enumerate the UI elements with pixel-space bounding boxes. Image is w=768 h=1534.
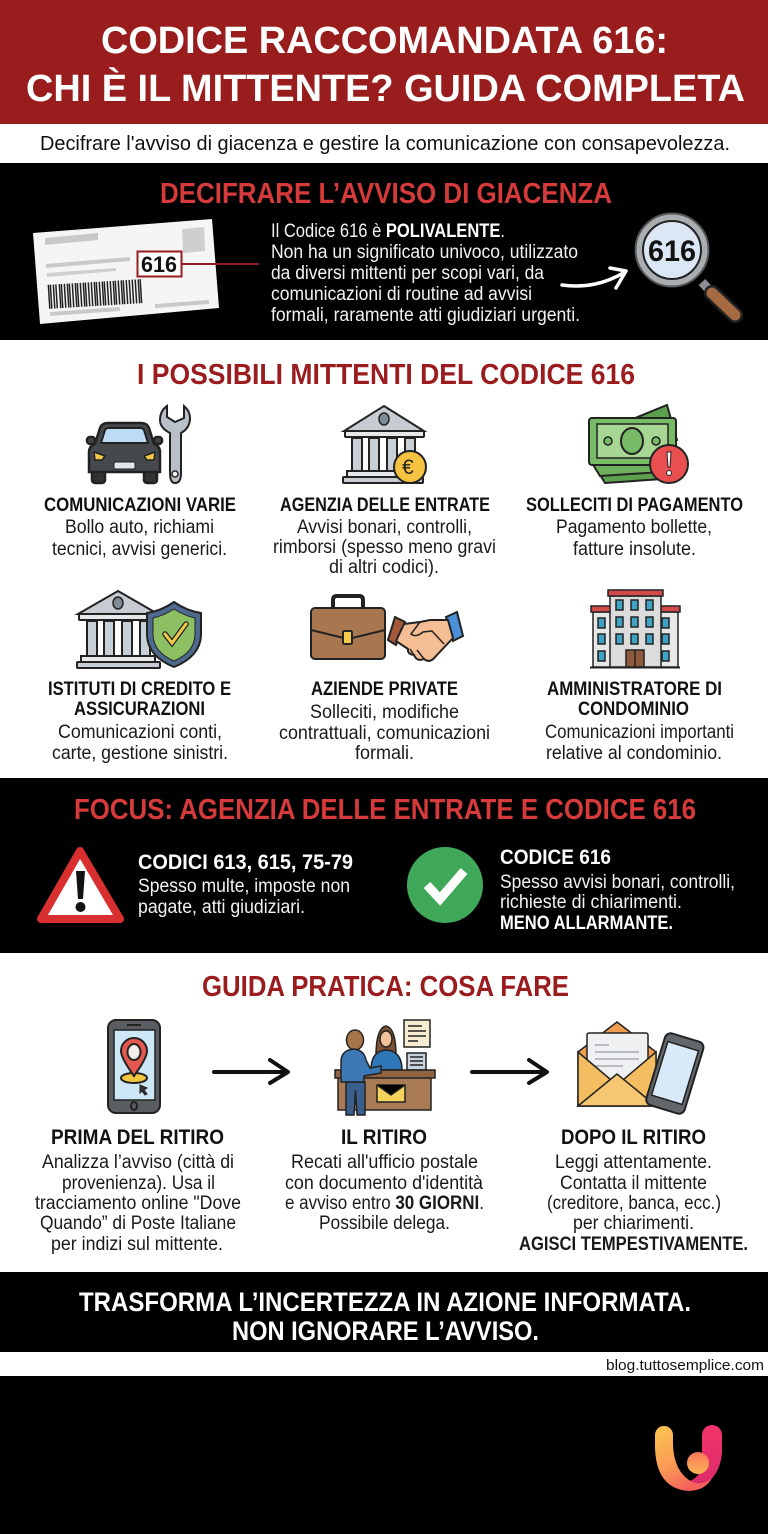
source credit	[0, 1352, 768, 1376]
panel: closing banner: NON IGNORARE L’AVVISO.	[232, 1316, 539, 1346]
label: di altri codici).	[329, 557, 439, 578]
icon: bank with euro coin	[343, 406, 426, 483]
step: il ritiro	[285, 1126, 484, 1234]
step: dopo il ritiro: per chiarimenti.	[573, 1213, 694, 1234]
footer area	[0, 1376, 768, 1534]
step: dopo il ritiro: (creditore, banca, ecc.)	[547, 1193, 721, 1214]
icon: bank with shield	[77, 591, 201, 668]
text: codice 616: MENO ALLARMANTE.	[500, 913, 673, 934]
icon: phone with map pin	[108, 1020, 160, 1113]
text: codici 613: CODICI 613, 615, 75-79	[138, 851, 353, 874]
label: relative al condominio.	[546, 743, 722, 764]
label: AMMINISTRATORE DI	[547, 679, 722, 700]
heading: guida pratica: GUIDA PRATICA: COSA FARE	[202, 971, 569, 1003]
text: polivalente: da diversi mittenti per scopi vari, da	[271, 263, 544, 284]
text: codice 616: richieste di chiarimenti.	[500, 892, 682, 913]
label: rimborsi (spesso meno gravi	[273, 537, 496, 558]
text: polivalente: Non ha un significato univoco, utilizzato	[271, 242, 578, 263]
step: il ritiro: e avviso entro 30 GIORNI.	[285, 1193, 484, 1214]
label: Bollo auto, richiami	[65, 517, 214, 538]
icon: logo	[655, 1425, 722, 1491]
heading: focus: FOCUS: AGENZIA DELLE ENTRATE E CODICE 616	[74, 794, 696, 826]
icon: postal notice	[33, 219, 259, 324]
icon: briefcase and handshake	[311, 596, 463, 661]
arrow: step 2 to 3	[472, 1060, 547, 1083]
item: amministratore di condominio	[545, 590, 734, 764]
label	[273, 495, 496, 578]
text: codice 616: Spesso avvisi bonari, controlli,	[500, 872, 735, 893]
icon: warning triangle	[41, 851, 120, 919]
step: prima del ritiro: tracciamento online "Dove	[35, 1193, 241, 1214]
step: prima del ritiro	[35, 1126, 241, 1255]
panel: decifrare l'avviso	[0, 163, 768, 340]
item: comunicazioni varie	[44, 406, 236, 560]
step: dopo il ritiro: Contatta il mittente	[560, 1173, 707, 1194]
item: istituti di credito	[48, 591, 231, 764]
step: prima del ritiro: per indizi sul mittente.	[51, 1234, 223, 1255]
item: agenzia delle entrate	[273, 406, 496, 578]
text: codici 613	[138, 851, 353, 918]
title: CHI È IL MITTENTE? GUIDA COMPLETA	[26, 66, 745, 110]
icon: car and wrench	[87, 406, 190, 483]
text: polivalente: comunicazioni di routine ad avvisi	[271, 284, 532, 305]
icon: bank with euro coin: €	[402, 456, 414, 479]
panel: focus agenzia delle entrate	[0, 778, 768, 953]
title: CODICE RACCOMANDATA 616:	[101, 20, 668, 62]
step: dopo il ritiro: DOPO IL RITIRO	[561, 1126, 706, 1149]
icon: magnifier: 616	[648, 235, 696, 268]
label	[48, 679, 231, 764]
label: carte, gestione sinistri.	[52, 743, 228, 764]
source credit: blog.tuttosemplice.com	[606, 1357, 764, 1374]
icon: open envelope and phone	[578, 1022, 705, 1115]
label: AGENZIA DELLE ENTRATE	[280, 495, 490, 516]
step: prima del ritiro: PRIMA DEL RITIRO	[51, 1126, 224, 1149]
header band	[0, 0, 768, 124]
label: contrattuali, comunicazioni	[279, 723, 490, 744]
text: codice 616	[500, 846, 735, 934]
icon: green check	[407, 847, 483, 923]
subtitle band	[0, 124, 768, 163]
step: dopo il ritiro	[519, 1126, 748, 1255]
step: prima del ritiro: Quando” di Poste Italiane	[40, 1213, 236, 1234]
icon: apartment building	[590, 590, 680, 668]
label	[279, 679, 490, 764]
arrow: step 1 to 2	[214, 1060, 288, 1083]
step: il ritiro: Possibile delega.	[319, 1213, 450, 1234]
text: polivalente: Il Codice 616 è POLIVALENTE.	[271, 221, 505, 242]
icon: magnifier	[636, 214, 735, 315]
icon: post office counter	[335, 1020, 435, 1115]
item: aziende private	[279, 596, 490, 764]
label: Pagamento bollette,	[556, 517, 712, 538]
label	[545, 679, 734, 764]
label: tecnici, avvisi generici.	[52, 539, 227, 560]
title	[26, 20, 745, 110]
arrow: to magnifier	[562, 268, 626, 288]
label: Comunicazioni importanti	[545, 722, 734, 743]
text: codici 613: Spesso multe, imposte non	[138, 876, 350, 897]
label	[44, 495, 236, 560]
label: Comunicazioni conti,	[58, 722, 222, 743]
label: fatture insolute.	[573, 539, 696, 560]
step: il ritiro: IL RITIRO	[341, 1126, 427, 1149]
step: prima del ritiro: Analizza l’avviso (città di	[42, 1152, 234, 1173]
label: formali.	[355, 743, 414, 764]
label: Solleciti, modifiche	[310, 702, 459, 723]
label: COMUNICAZIONI VARIE	[44, 495, 236, 516]
panel: closing banner: TRASFORMA L’INCERTEZZA IN AZIONE INFORMATA.	[79, 1287, 691, 1317]
step: prima del ritiro: provenienza). Usa il	[62, 1173, 215, 1194]
step: il ritiro: Recati all'ufficio postale	[291, 1152, 478, 1173]
heading: decifrare: DECIFRARE L’AVVISO DI GIACENZA	[160, 178, 612, 210]
icon: banknotes and alert	[589, 405, 688, 483]
subtitle band: Decifrare l'avviso di giacenza e gestire la comunicazione con consapevolezza.	[40, 132, 730, 155]
text: polivalente	[271, 221, 580, 326]
text: codice 616: CODICE 616	[500, 846, 611, 869]
label	[526, 495, 743, 560]
text: codici 613: pagate, atti giudiziari.	[138, 897, 305, 918]
step: il ritiro: con documento d'identità	[285, 1173, 483, 1194]
label: ASSICURAZIONI	[74, 699, 205, 720]
panel: possibili mittenti	[0, 340, 768, 778]
text: polivalente: formali, raramente atti giudiziari urgenti.	[271, 305, 580, 326]
panel: closing banner	[0, 1272, 768, 1352]
label: AZIENDE PRIVATE	[311, 679, 458, 700]
label: Avvisi bonari, controlli,	[297, 517, 472, 538]
panel: guida pratica	[0, 953, 768, 1272]
label: ISTITUTI DI CREDITO E	[48, 679, 231, 700]
step: dopo il ritiro: Leggi attentamente.	[555, 1152, 712, 1173]
label: CONDOMINIO	[578, 699, 689, 720]
item: solleciti di pagamento	[526, 405, 743, 560]
heading: possibili mittenti: I POSSIBILI MITTENTI DEL CODICE 616	[137, 359, 635, 391]
icon: postal notice: 616	[141, 252, 177, 277]
